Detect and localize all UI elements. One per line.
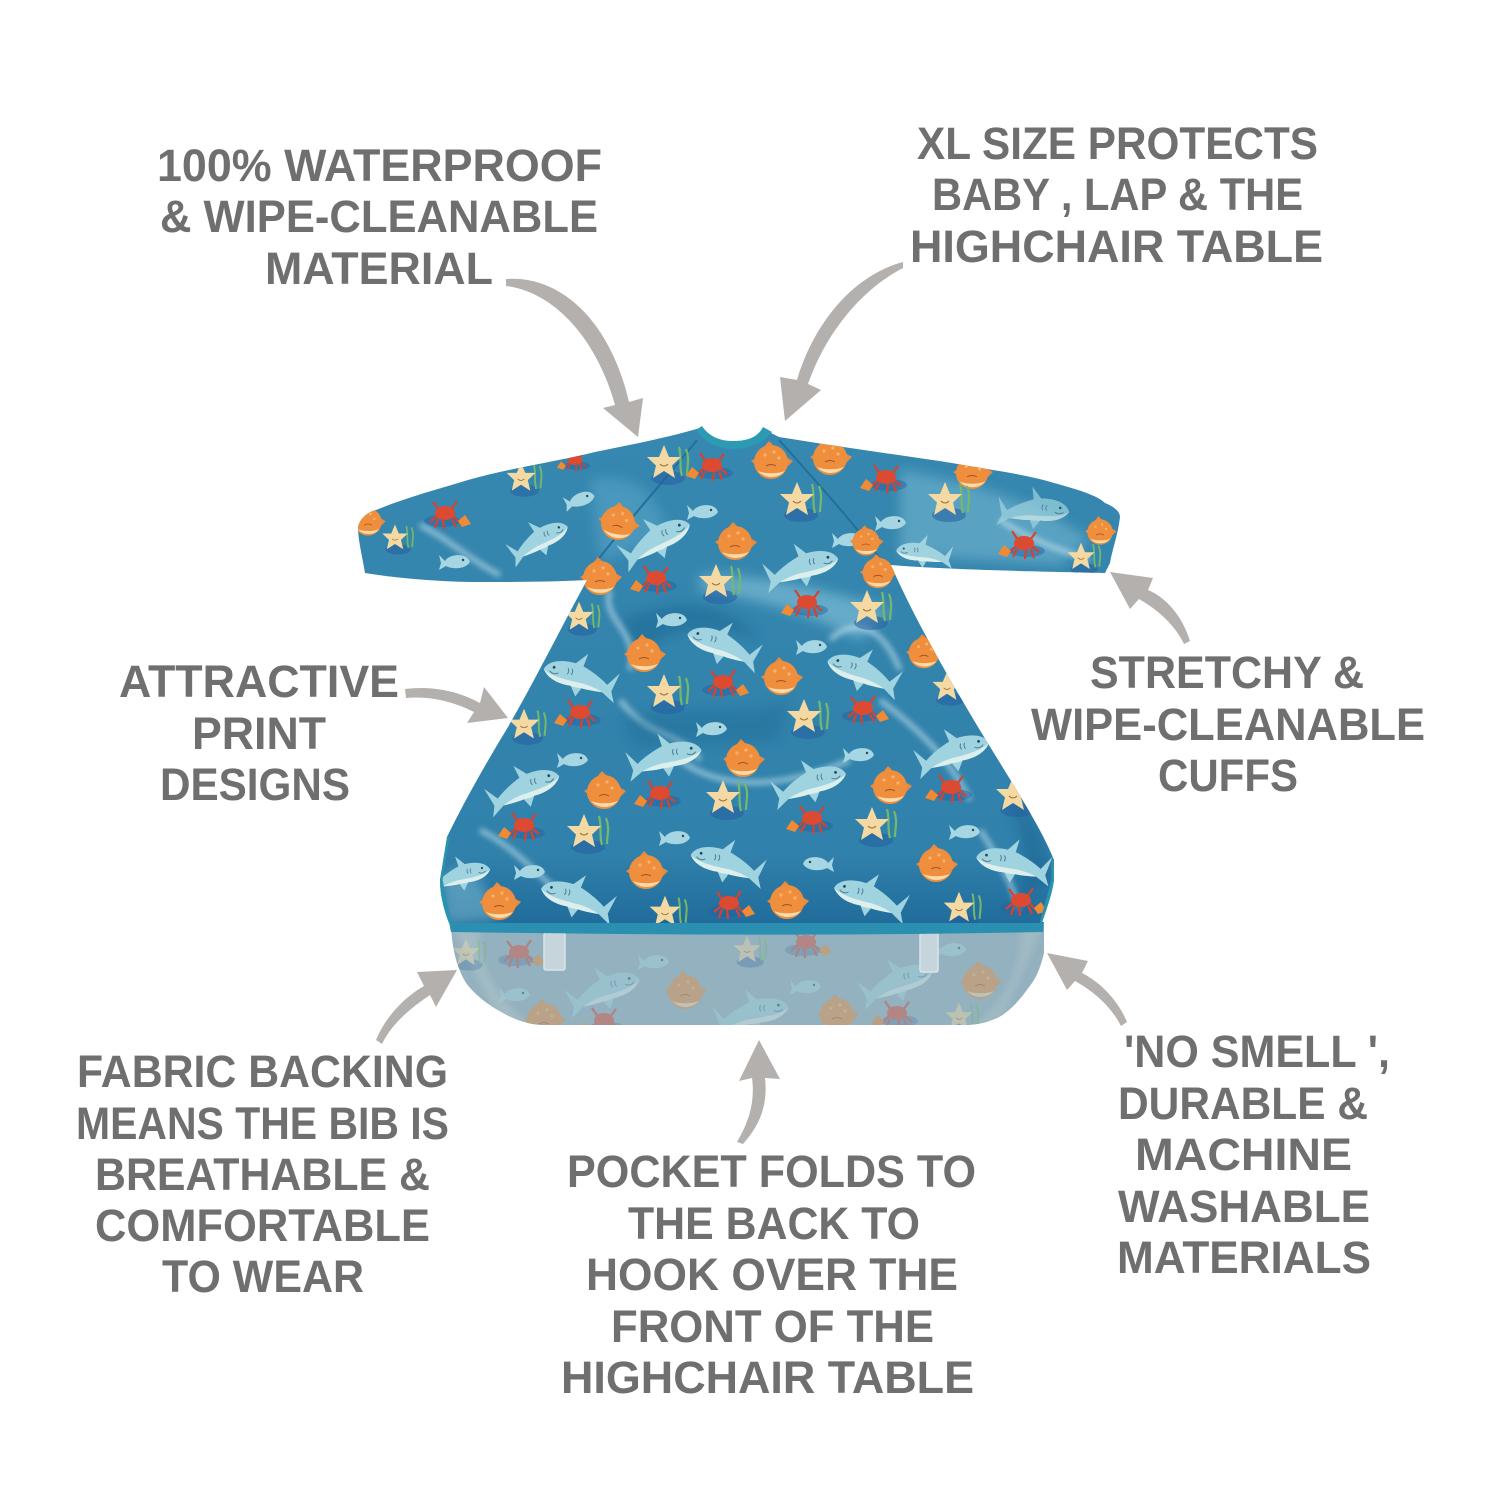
label: pocket: FRONT OF THE <box>611 1301 934 1352</box>
bib illustration <box>350 420 1130 1037</box>
label: pocket: HOOK OVER THE <box>586 1249 958 1300</box>
label: no smell: DURABLE & <box>1118 1078 1368 1129</box>
label: attractive print: DESIGNS <box>160 759 350 810</box>
label: attractive print <box>119 656 399 810</box>
velcro tab left <box>544 933 565 970</box>
label: stretchy cuffs <box>1031 647 1425 801</box>
label: pocket: POCKET FOLDS TO <box>567 1146 976 1197</box>
label: no smell: 'NO SMELL ', <box>1124 1026 1390 1077</box>
arrow: fabric backing <box>376 970 457 1044</box>
label: attractive print: ATTRACTIVE <box>119 656 399 707</box>
label: waterproof: & WIPE-CLEANABLE <box>160 191 598 242</box>
side binding <box>440 837 1054 923</box>
sleeve seams <box>598 440 880 559</box>
label: stretchy cuffs: CUFFS <box>1158 750 1298 801</box>
label: no smell <box>1117 1026 1390 1283</box>
label: pocket <box>561 1146 976 1403</box>
arrow: XL size <box>780 262 903 421</box>
label: no smell: WASHABLE <box>1118 1181 1370 1232</box>
label: fabric backing: MEANS THE BIB IS <box>76 1098 449 1149</box>
collar <box>696 426 772 449</box>
body and sleeves <box>350 420 1130 932</box>
velcro tab right <box>920 933 938 972</box>
label: attractive print: PRINT <box>192 708 326 759</box>
arrow: stretchy cuffs <box>1110 572 1190 644</box>
arrow: attractive print <box>405 687 508 723</box>
label: stretchy cuffs: WIPE-CLEANABLE <box>1031 699 1425 750</box>
label: fabric backing: FABRIC BACKING <box>77 1046 448 1097</box>
label: waterproof: 100% WATERPROOF <box>157 140 602 191</box>
faded print seen through the pocket <box>454 934 1002 1025</box>
label: no smell: MACHINE <box>1135 1129 1352 1180</box>
sheen and folds <box>420 470 1090 925</box>
label: XL size <box>910 118 1323 272</box>
label: fabric backing: BREATHABLE & <box>95 1149 430 1200</box>
label: pocket: HIGHCHAIR TABLE <box>561 1352 974 1403</box>
label: XL size: HIGHCHAIR TABLE <box>910 221 1323 272</box>
label: stretchy cuffs: STRETCHY & <box>1090 647 1364 698</box>
label: no smell: MATERIALS <box>1117 1232 1371 1283</box>
label: pocket: THE BACK TO <box>628 1198 920 1249</box>
arrow: no smell <box>1047 953 1127 1026</box>
pocket <box>451 925 1044 1025</box>
arrow: waterproof <box>506 279 643 437</box>
label: fabric backing: COMFORTABLE <box>95 1200 430 1251</box>
label: XL size: BABY , LAP & THE <box>932 169 1303 220</box>
label: fabric backing <box>76 1046 449 1302</box>
label: XL size: XL SIZE PROTECTS <box>917 118 1318 169</box>
arrow: pocket <box>737 1040 780 1144</box>
pocket binding <box>449 922 1044 935</box>
label: fabric backing: TO WEAR <box>162 1251 364 1302</box>
sea creature print <box>352 437 1116 932</box>
label: waterproof: MATERIAL <box>265 243 493 294</box>
label: waterproof <box>157 140 602 294</box>
